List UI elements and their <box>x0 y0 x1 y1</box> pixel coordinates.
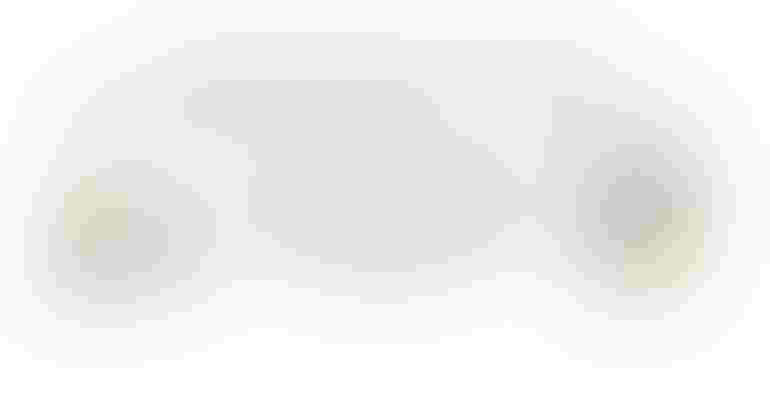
left yellow tint <box>64 176 128 256</box>
right circle dark core <box>600 168 672 248</box>
left blurred circle <box>48 160 216 304</box>
inner haze band <box>24 32 736 328</box>
left circle outer tone <box>48 160 216 304</box>
right blurred circle <box>576 144 704 288</box>
left circle core <box>72 208 168 280</box>
central blurred body joined to right shape <box>184 80 712 296</box>
right yellow tint <box>624 208 704 288</box>
right circle outer core <box>576 144 696 272</box>
